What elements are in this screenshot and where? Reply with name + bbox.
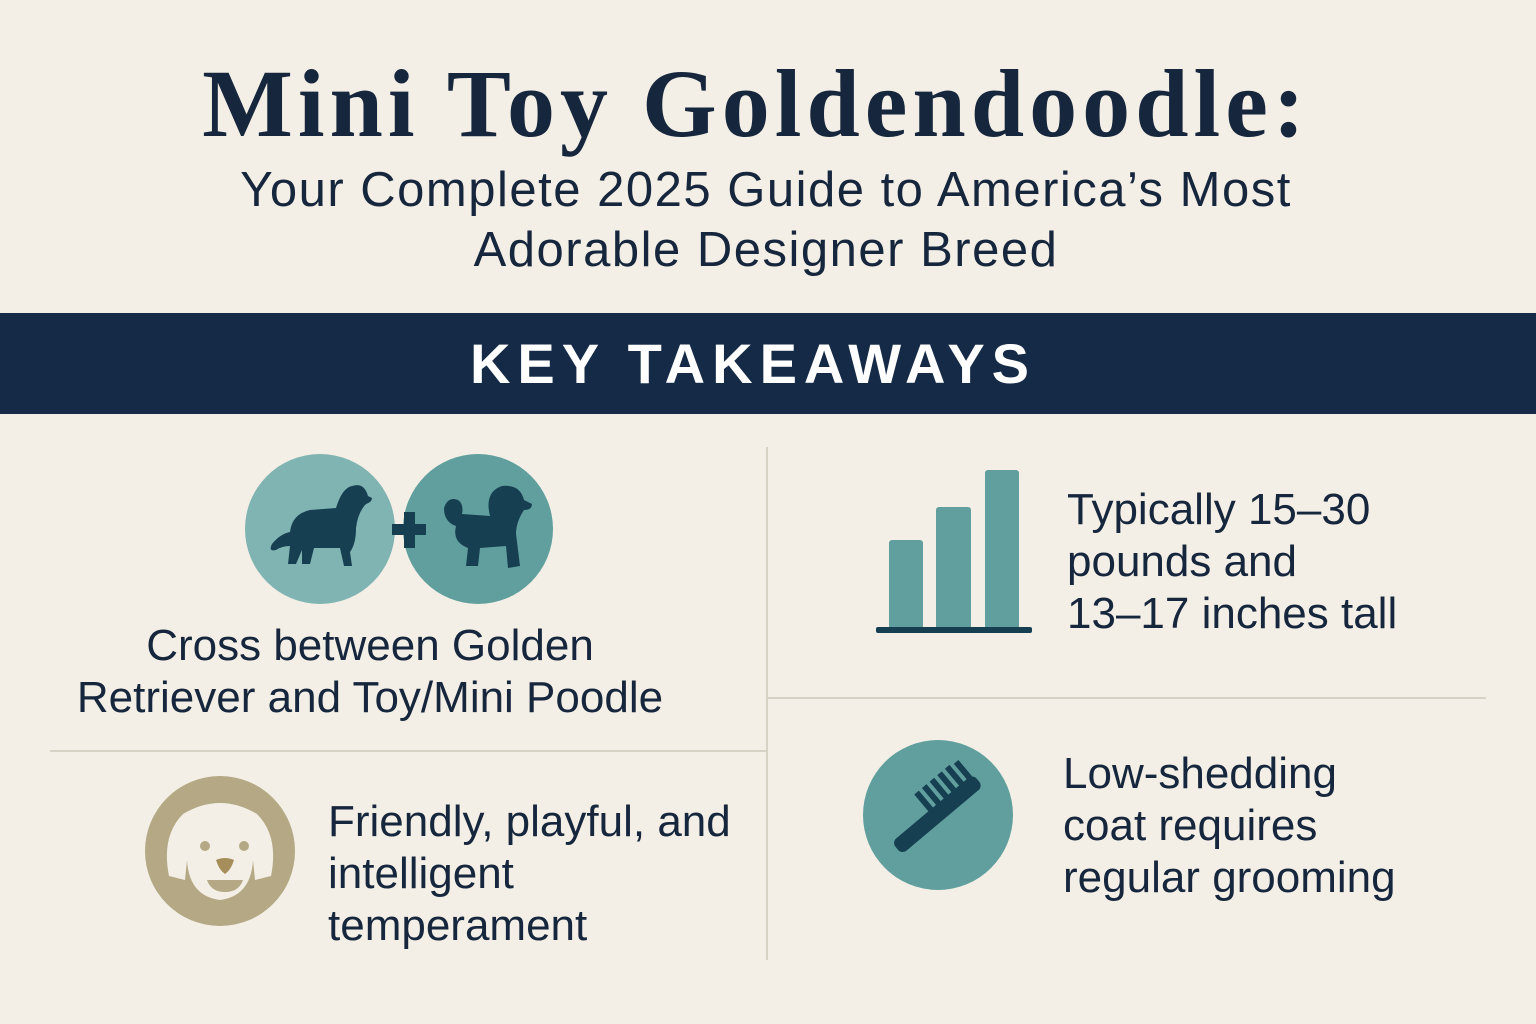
- text: size: Typically 15–30: [1067, 485, 1370, 534]
- text: cross: Cross between Golden: [146, 621, 594, 670]
- title: Mini Toy Goldendoodle:: [202, 50, 1310, 157]
- icon: dog face: [145, 776, 295, 926]
- text: grooming: Low-shedding: [1063, 749, 1337, 798]
- icon: bar chart: [876, 470, 1032, 633]
- subtitle: Adorable Designer Breed: [474, 223, 1058, 277]
- subtitle: Your Complete 2025 Guide to America’s Most: [240, 163, 1292, 217]
- text: cross: Retriever and Toy/Mini Poodle: [77, 673, 663, 722]
- text: grooming: coat requires: [1063, 801, 1317, 850]
- text: size: [1067, 485, 1397, 638]
- icon: comb: [863, 740, 1013, 890]
- subtitle: [240, 163, 1292, 277]
- text: temperament: Friendly, playful, and: [328, 797, 731, 846]
- text: size: 13–17 inches tall: [1067, 589, 1397, 638]
- text: grooming: regular grooming: [1063, 853, 1396, 902]
- banner: key takeaways: [0, 313, 1536, 414]
- text: temperament: [328, 797, 731, 950]
- text: grooming: [1063, 749, 1396, 902]
- text: size: pounds and: [1067, 537, 1297, 586]
- text: cross: [77, 621, 663, 722]
- icon: golden retriever plus poodle: [245, 454, 553, 604]
- text: temperament: temperament: [328, 901, 587, 950]
- text: temperament: intelligent: [328, 849, 514, 898]
- banner: key takeaways: KEY TAKEAWAYS: [470, 332, 1036, 395]
